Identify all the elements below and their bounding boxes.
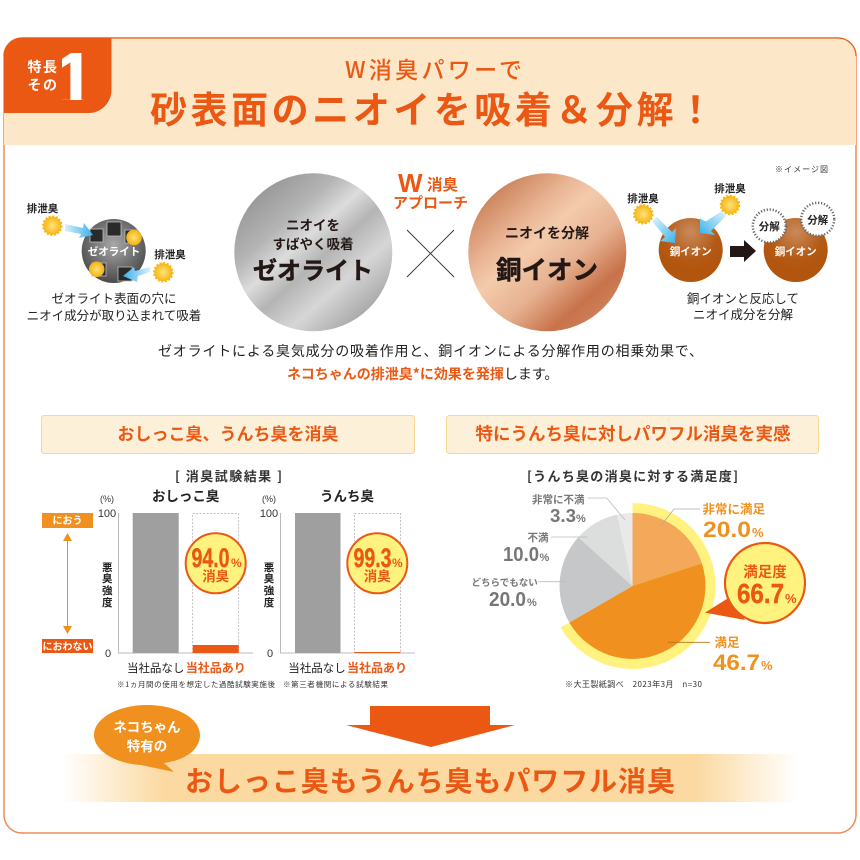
label: W approach: アプローチ	[393, 192, 468, 213]
pores	[90, 222, 137, 281]
label: W approach	[393, 168, 468, 213]
label: smell 1: 排泄臭	[27, 201, 59, 216]
chart title: satisfaction: [うんち臭の消臭に対する満足度]	[527, 466, 738, 485]
bar chart: urine odor	[98, 485, 253, 676]
callout: 99.3%: 99.3	[354, 543, 392, 573]
bar chart: urine odor: (%)	[100, 494, 114, 504]
bar chart: feces odor: 当社品あり	[347, 659, 407, 676]
decomposition badge 1	[753, 210, 786, 242]
banner: conclusion: おしっこ臭もうんち臭もパワフル消臭	[185, 760, 675, 800]
text: synergy description: ゼオライトによる臭気成分の吸着作用と、銅イオンによる分解作用の相乗効果で、	[158, 341, 703, 361]
label: very satisfied: 20.0	[703, 517, 751, 542]
badge: feature number 1: 特長	[28, 57, 58, 77]
label: neutral	[472, 575, 538, 611]
label: very satisfied: %	[752, 525, 764, 540]
bar chart: feces odor: 悪	[264, 560, 275, 575]
label: W approach: 消臭	[427, 173, 459, 195]
bubble: cat-specific	[94, 705, 200, 772]
title: W消臭パワーで	[345, 51, 522, 85]
bubble: cat-specific: 特有の	[127, 735, 167, 755]
callout: 94.0%: %	[231, 556, 242, 570]
bar chart: feces odor: 当社品なし	[288, 660, 346, 676]
callout: satisfaction 66.7%: %	[785, 591, 797, 606]
label: dissatisfied: %	[540, 552, 550, 564]
slice: neutral	[560, 537, 632, 622]
note: left chart: ※1ヵ月間の使用を想定した過酷試験実施後	[117, 679, 276, 690]
scale: smell to no smell: におう	[52, 512, 82, 527]
title	[150, 51, 714, 134]
caption: copper ion: 銅イオンと反応して	[687, 288, 799, 307]
caption: zeolite: ニオイ成分が取り込まれて吸着	[27, 305, 201, 324]
caption: copper ion	[687, 288, 799, 323]
bar chart: feces odor: 0	[267, 648, 273, 660]
note: image only: ※イメージ図	[775, 164, 828, 175]
label: very dissatisfied: 非常に不満	[532, 492, 585, 507]
caption: zeolite: ゼオライト表面の穴に	[51, 288, 177, 307]
callout: satisfaction 66.7%: 66.7	[737, 578, 784, 609]
callout: 99.3%: %	[392, 556, 403, 570]
bar chart: feces odor: うんち臭	[320, 485, 374, 505]
label: very dissatisfied: 3.3	[550, 506, 576, 526]
bar chart: feces odor: 強	[264, 583, 275, 598]
text: synergy description	[158, 341, 703, 384]
note: right chart: ※第三者機関による試験結果	[283, 679, 388, 690]
label: dissatisfied: 10.0	[503, 544, 539, 566]
heading: left section	[42, 416, 414, 454]
bar chart: feces odor: 度	[264, 595, 275, 610]
bar chart: feces odor: (%)	[262, 494, 276, 504]
bar chart: urine odor: 当社品あり	[186, 659, 246, 676]
note: survey source: ※大王製紙調べ 2023年3月 n=30	[565, 679, 703, 690]
ball after	[764, 218, 828, 282]
bar chart: urine odor: 当社品なし	[127, 660, 184, 676]
label: dissatisfied	[503, 530, 550, 566]
circle: zeolite: ゼオライト	[253, 251, 373, 286]
callout: 94.0%	[186, 533, 246, 593]
highlight ring	[561, 503, 715, 669]
bar chart: feces odor: 臭	[264, 571, 275, 586]
circle: copper ion: ニオイを分解	[505, 223, 589, 243]
icon: smell sun 1	[43, 217, 61, 235]
label: very dissatisfied	[532, 492, 586, 526]
arrow in 2	[123, 267, 150, 282]
label: neutral: どちらでもない	[472, 575, 538, 589]
label: neutral: %	[527, 597, 537, 609]
badge: feature number 1: その	[28, 75, 58, 95]
decomposition badge 2: 分解	[807, 212, 829, 228]
text: synergy description: ネコちゃんの排泄臭*に効果を発揮します。	[287, 364, 558, 384]
slice: very dissatisfied	[617, 513, 632, 586]
callout: 99.3%: 消臭	[364, 565, 391, 585]
banner: conclusion	[62, 754, 798, 802]
callout: 94.0%: 消臭	[202, 565, 230, 585]
chart title: test results: [ 消臭試験結果 ]	[175, 466, 282, 485]
callout: 99.3%	[347, 533, 407, 593]
pie chart: satisfaction	[538, 498, 715, 669]
scale: smell to no smell	[42, 512, 93, 653]
badge: feature number 1	[4, 38, 112, 113]
label: satisfied: 満足	[714, 632, 740, 651]
icons: trapped smell	[90, 230, 141, 276]
heading: left section: おしっこ臭、うんち臭を消臭	[118, 420, 338, 445]
slice: very satisfied	[632, 513, 702, 586]
slice: dissatisfied	[578, 515, 632, 586]
bar chart: urine odor: おしっこ臭	[152, 485, 220, 505]
arrow in 1	[65, 223, 93, 238]
ball label before: 銅イオン	[670, 244, 712, 259]
ball label after: 銅イオン	[775, 244, 817, 259]
label: satisfied: %	[761, 658, 773, 673]
title: 砂表面のニオイを吸着＆分解！	[150, 80, 714, 134]
circle: zeolite: ニオイを	[286, 214, 340, 234]
bar chart: urine odor: 100	[98, 508, 116, 520]
ball label: ゼオライト	[88, 244, 140, 259]
badge: feature number 1: 1	[52, 36, 96, 125]
arrow: down	[346, 706, 515, 747]
arrows	[652, 211, 726, 243]
suns	[634, 196, 739, 223]
label: satisfied: 46.7	[713, 650, 760, 675]
bar chart: feces odor	[260, 485, 415, 676]
heading: right section: 特にうんち臭に対しパワフル消臭を実感	[476, 421, 790, 446]
bar chart: urine odor: 度	[102, 595, 113, 610]
label: very satisfied	[702, 498, 766, 542]
label: smell 2: 排泄臭	[154, 247, 186, 262]
icon: smell sun 2	[154, 263, 172, 281]
diagram: zeolite small ball	[27, 201, 186, 283]
scale: smell to no smell: におわない	[42, 638, 92, 653]
bar chart: feces odor: 100	[260, 508, 278, 520]
heading: right section	[446, 416, 818, 454]
bubble: cat-specific: ネコちゃん	[113, 716, 181, 736]
label: satisfied	[713, 632, 773, 675]
bar chart: urine odor: 臭	[102, 571, 113, 586]
circle: zeolite	[234, 173, 392, 331]
label: very satisfied: 非常に満足	[702, 498, 766, 518]
callout: satisfaction 66.7%: 満足度	[743, 561, 787, 582]
caption: zeolite	[27, 288, 201, 324]
ball	[82, 219, 146, 283]
label: dissatisfied: 不満	[528, 530, 549, 545]
bar chart: urine odor: 強	[102, 583, 113, 598]
callout: 94.0%: 94.0	[192, 543, 230, 573]
circle: copper ion	[468, 173, 626, 331]
label: very dissatisfied: %	[576, 513, 586, 525]
ball before	[659, 218, 723, 282]
label: neutral: 20.0	[489, 589, 526, 611]
slice: satisfied	[569, 563, 705, 659]
diagram: copper ion small balls	[627, 181, 834, 282]
leader lines	[538, 498, 710, 642]
caption: copper ion: ニオイ成分を分解	[693, 304, 793, 323]
circle: zeolite: すばやく吸着	[272, 233, 354, 253]
circle: copper ion: 銅イオン	[496, 250, 598, 287]
bar chart: urine odor: 悪	[102, 560, 113, 575]
callout: satisfaction 66.7%	[705, 543, 805, 623]
arrow: reaction	[730, 240, 756, 262]
multiply sign	[407, 230, 454, 277]
label: smell 4: 排泄臭	[714, 181, 746, 196]
decomposition badge 1: 分解	[759, 219, 780, 234]
label: W approach: W	[398, 168, 423, 198]
bar chart: urine odor: 0	[105, 648, 111, 660]
label: smell 3: 排泄臭	[627, 191, 659, 206]
decomposition badge 2	[801, 203, 834, 236]
